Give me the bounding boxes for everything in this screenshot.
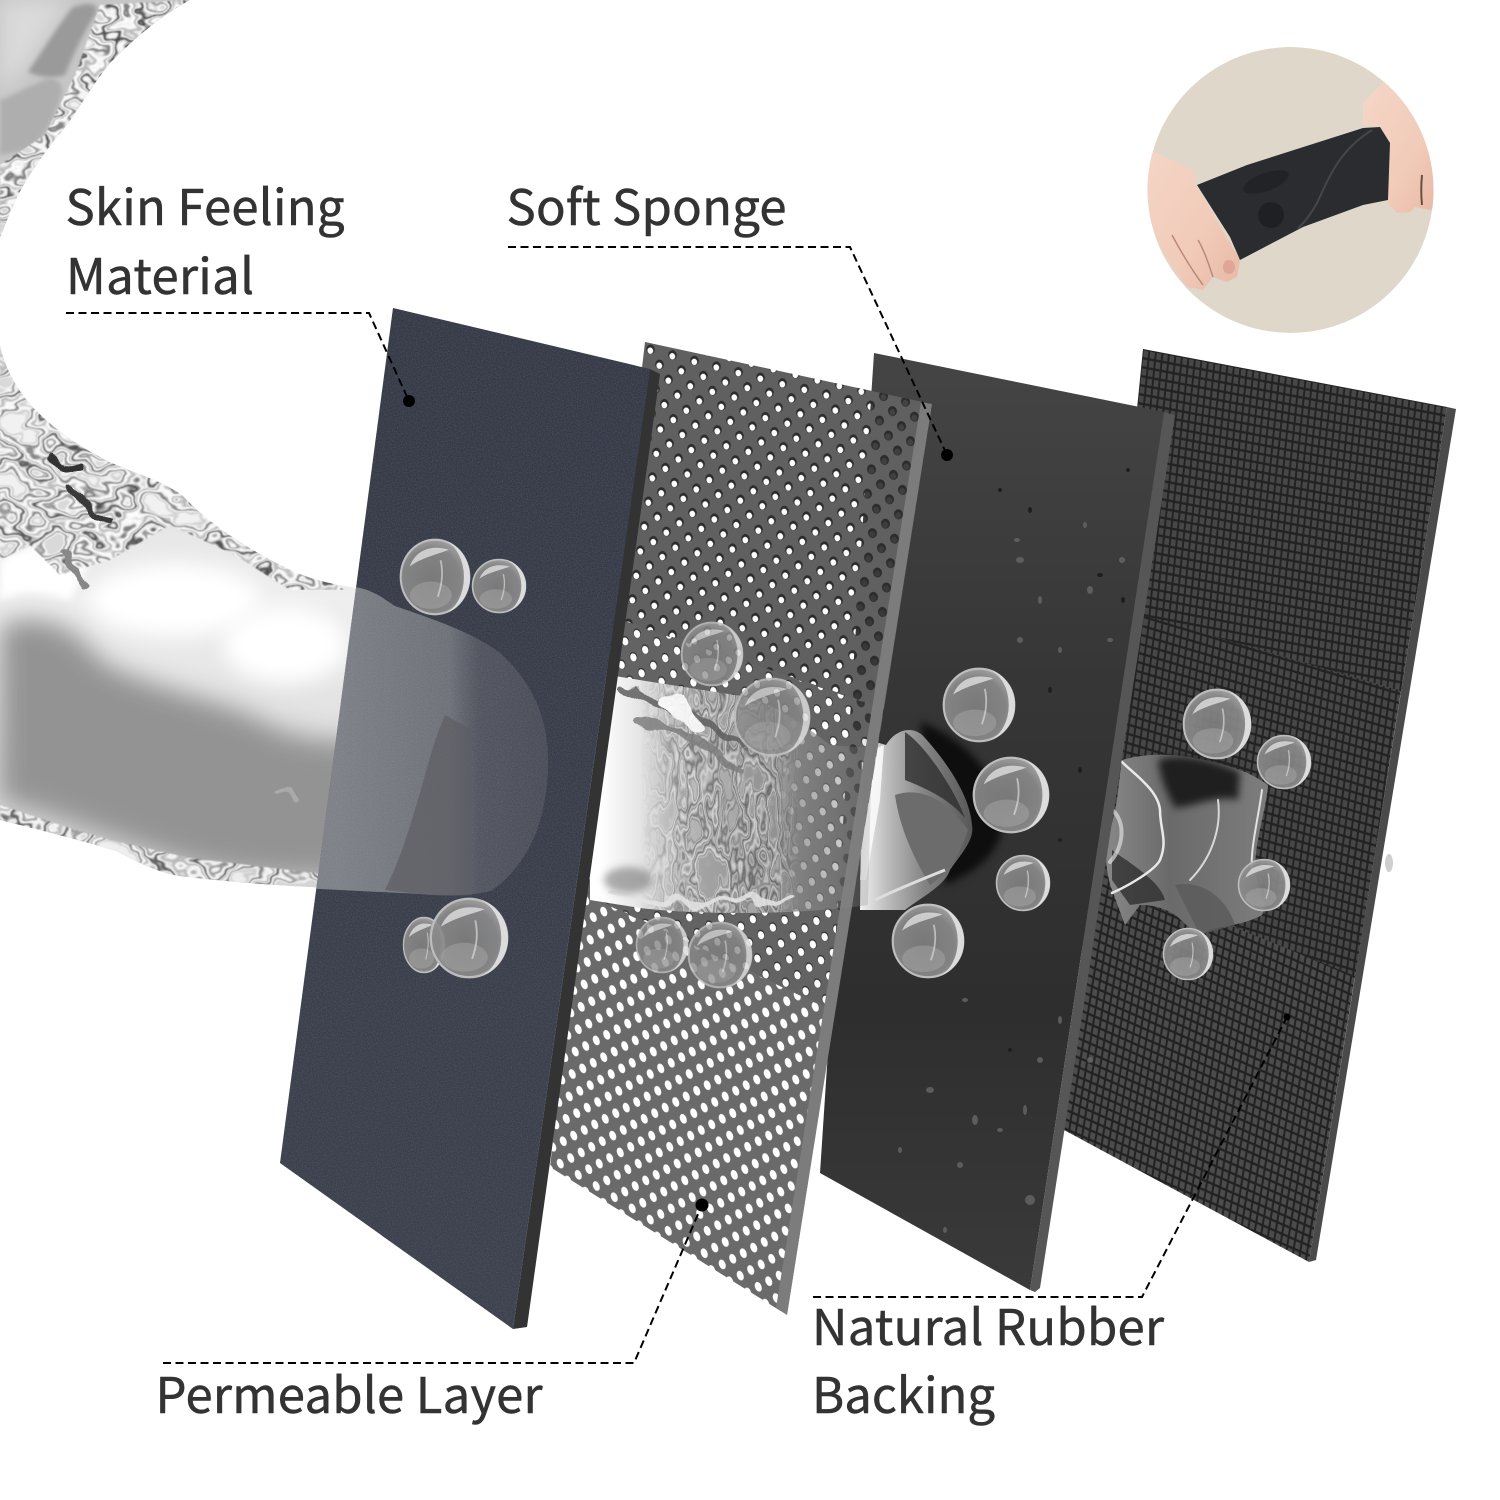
droplets on permeable layer — [636, 622, 810, 988]
panel: soft sponge — [820, 353, 1175, 1292]
sponge speckles — [898, 522, 1125, 1233]
inset photo: hands stretching black sleeve — [1140, 47, 1440, 333]
callout: natural rubber backing: Backing — [812, 1357, 995, 1428]
callout: soft sponge: Soft Sponge — [506, 169, 786, 240]
panel: permeable layer — [550, 342, 932, 1315]
small droplet behind backing — [1385, 854, 1393, 872]
water seen through skin feeling panel — [300, 586, 548, 896]
droplets on backing — [1163, 689, 1311, 980]
water grey core — [0, 619, 370, 877]
water stream upper left swirl — [0, 0, 190, 240]
right hand — [1363, 80, 1440, 213]
callout: permeable layer: Permeable Layer — [156, 1357, 543, 1428]
droplets on skin feeling panel — [400, 539, 526, 978]
callout: skin feeling material: Skin Feeling — [66, 169, 344, 240]
left hand — [1148, 152, 1240, 290]
water through permeable layer — [590, 660, 872, 920]
glassy ripples — [0, 345, 345, 590]
panel: skin feeling material — [280, 308, 660, 1329]
callout: skin feeling material: Material — [66, 238, 254, 309]
callout: natural rubber backing — [812, 1014, 1290, 1428]
water through backing — [1106, 755, 1268, 935]
callout: soft sponge — [506, 169, 953, 461]
panel: natural rubber backing — [1064, 349, 1456, 1262]
callout: permeable layer — [156, 1198, 708, 1428]
water stream main body — [0, 346, 356, 888]
callout: natural rubber backing: Natural Rubber — [812, 1289, 1165, 1360]
callout: skin feeling material — [66, 169, 415, 407]
droplets on sponge — [892, 668, 1050, 978]
water through sponge — [860, 722, 1003, 910]
sleeve — [1197, 127, 1390, 260]
